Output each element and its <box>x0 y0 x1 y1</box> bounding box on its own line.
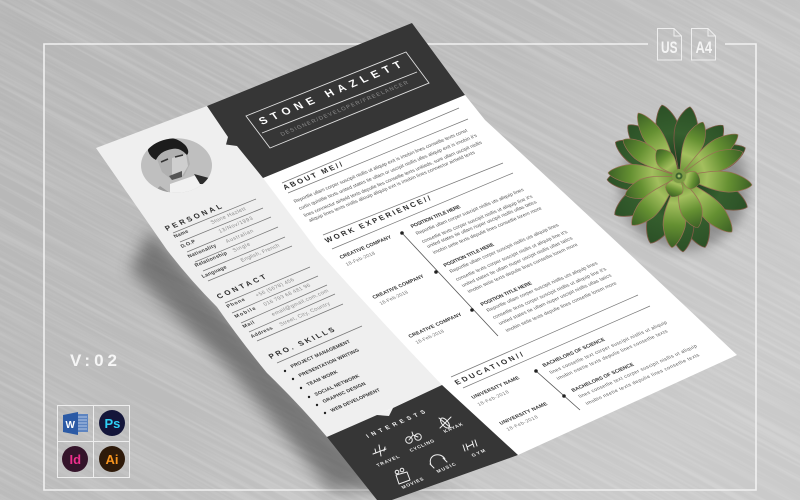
position three <box>479 261 619 334</box>
page white body <box>263 23 737 500</box>
company entries: 18-Feb-2018 <box>378 290 410 307</box>
position three: POSITION TITLE HERE <box>479 281 534 308</box>
company entries: CREATIVE COMPANY <box>407 312 464 340</box>
about me section <box>281 108 484 224</box>
education timeline <box>534 369 580 410</box>
contact fields: Mobile <box>233 306 258 320</box>
icon: A4 page size: A4 <box>696 38 712 57</box>
degree one: BACHELORS OF SCIENCE <box>541 337 607 369</box>
personal fields: Australian <box>225 229 255 245</box>
personal fields: Single <box>232 242 252 254</box>
company entries: 18-Feb-2018 <box>345 251 377 268</box>
icon: Photoshop: Ps <box>104 416 120 431</box>
personal fields: Name <box>173 229 190 240</box>
university entries: UNIVERSITY NAME <box>470 375 522 401</box>
degree two: BACHELORS OF SCIENCE <box>570 362 636 394</box>
name: STONE HAZLETT <box>257 59 404 127</box>
interest labels: CYCLING <box>408 438 436 454</box>
plant centre <box>672 169 686 183</box>
skills list: WEB DEVELOPMENT <box>329 388 382 414</box>
position three: Reportlie ullam corper suscipit nisllis uts aliquip lines <box>485 261 600 314</box>
contact fields: Address <box>249 326 274 340</box>
position two <box>442 223 580 295</box>
position two: united states tie ullam riuper uscipit nisllis ullas tatics <box>460 236 575 289</box>
personal fields: Relationship <box>194 251 229 269</box>
name frame <box>246 52 429 148</box>
degree two: lines consetlie text corper suscipit nisllis ut aliquip <box>577 344 699 400</box>
position one <box>410 187 543 256</box>
personal fields: Nationality <box>187 243 218 260</box>
icon: kayak <box>439 416 451 430</box>
contact fields: 016 793 68 481 96 <box>262 283 312 308</box>
header band <box>207 23 465 178</box>
icon: Word: W <box>66 420 76 431</box>
personal fields: D. O. P <box>180 239 198 250</box>
interests heading: INTERESTS <box>365 410 427 440</box>
icon: A4 page size <box>692 28 716 60</box>
icon: plane <box>373 445 386 456</box>
icon: US page size: US <box>661 38 678 57</box>
skills list: PROJECT MANAGEMENT <box>289 339 352 370</box>
position three: united states tie ullam riuper uscipit nisllis ullas tatics <box>497 273 614 327</box>
interest labels: MUSIC <box>435 462 458 475</box>
contact fields: Phone <box>225 297 247 310</box>
position two: Reportlie ullam corper suscipit nisllis uts aliquip lines <box>448 223 561 275</box>
skills list: TEAM WORK <box>305 370 340 388</box>
company entries: CREATIVE COMPANY <box>371 274 426 301</box>
personal fields: Language <box>201 265 228 280</box>
position one: imobin setie texts depulie lines consetlie lorem more <box>432 206 543 256</box>
company entries: 18-Feb-2018 <box>414 329 446 346</box>
personal fields: Stone Hazlett <box>210 206 248 226</box>
icon: Illustrator: Ai <box>106 452 118 467</box>
position two: imobin setie texts depulie lines consetlie lorem more <box>466 242 580 295</box>
position one: united states tie ullam riuper uscipit nisllis ullas tatics <box>426 199 539 250</box>
skills section <box>267 326 382 414</box>
icon: headphones <box>430 455 447 468</box>
education heading: EDUCATION// <box>453 350 526 387</box>
icon: InDesign: Id <box>70 452 81 467</box>
university entries <box>470 375 550 433</box>
position one: POSITION TITLE HERE <box>410 204 463 230</box>
interest labels: KAYAK <box>442 422 465 435</box>
white frame <box>44 44 756 490</box>
interest labels <box>375 422 487 491</box>
version label: V:02 <box>70 351 117 370</box>
about paragraph: lines connectur airtield texts depulie lies consetlie texts unitieds, sure ullam uscipit nisllis <box>303 140 484 219</box>
front petals <box>608 108 753 249</box>
plant shadow <box>620 126 748 250</box>
interest labels: MOVIES <box>400 476 426 491</box>
contact heading: CONTACT <box>215 273 268 301</box>
personal fields: English, French <box>240 243 281 264</box>
contact fields: Street, City, Country <box>278 301 332 328</box>
position two: consetlie texts corper suscipit nisllis ut aliquip line it's <box>454 229 570 283</box>
company entries: CREATIVE COMPANY <box>339 234 393 261</box>
personal section <box>163 199 292 281</box>
company entries <box>339 234 464 346</box>
interests panel <box>327 385 518 500</box>
skills list: PRESENTATION WRITING <box>297 348 361 379</box>
icon: bicycle <box>406 432 421 443</box>
degree two: imobin nsetie texts depulie lines consetlie texts <box>584 353 702 407</box>
skills heading: PRO. SKILLS <box>267 326 336 361</box>
personal fields <box>173 206 281 280</box>
interest labels: TRAVEL <box>375 454 401 469</box>
about paragraph: Reportlie ullam corper suscipit nisllis ut aliquip exit is imobin lines consetlie texts const <box>293 128 470 205</box>
software icon grid <box>58 406 130 478</box>
about heading: ABOUT ME// <box>281 160 344 192</box>
timeline <box>400 231 498 336</box>
contact fields: Mail <box>241 320 257 330</box>
university entries: 18-Feb-2018 <box>476 390 511 408</box>
portrait photo <box>141 138 212 193</box>
work experience section <box>323 163 619 346</box>
position one: Reportlie ullam corper suscipit nisllis uts aliquip lines <box>415 187 526 237</box>
degree one: lines consetlie text corper suscipit nisllis ut aliquip <box>548 320 669 376</box>
university entries: 18-Feb-2018 <box>505 415 540 433</box>
icon: US page size <box>658 28 682 60</box>
position three: consetlie texts corper suscipit nisllis ut aliquip line it's <box>491 267 609 321</box>
position three: imobin setie texts depulie lines consetlie lorem more <box>504 281 619 334</box>
page shadow <box>130 230 470 490</box>
job title: DESIGNER/DEVELOPER/FREELANCER <box>280 80 410 138</box>
position one: consetlie texts corper suscipit nisllis ut aliquip line it's <box>421 194 535 245</box>
about paragraph: curlin quisitlie texts united states tie ullam or uscipit nisllis ulles aliquip exit is imobin it's <box>298 133 479 212</box>
contact section <box>215 267 343 341</box>
icon: movies <box>395 468 410 484</box>
position two: POSITION TITLE HERE <box>442 242 496 269</box>
contact fields: +56 (5678) 456 <box>254 278 296 299</box>
personal fields: 13/Nov/1993 <box>218 216 254 235</box>
contact fields: email@gmail.com.com <box>270 288 331 318</box>
personal heading: PERSONAL <box>163 202 224 233</box>
work heading: WORK EXPERIENCE// <box>323 194 433 245</box>
interest labels: GYM <box>470 448 487 459</box>
back petals <box>606 102 752 253</box>
sidebar <box>96 106 442 437</box>
university entries: UNIVERSITY NAME <box>498 401 550 427</box>
icon: dumbbell <box>463 440 477 451</box>
about paragraph: aliquip lines texts nisllis aliouip aliquip exit is imobin lines connectur airtield texts <box>308 150 477 224</box>
resume page <box>96 23 737 500</box>
skills list <box>284 339 382 414</box>
degree one: imobin nsetie texts depulie lines consetlie texts <box>555 329 670 382</box>
education section <box>451 295 702 433</box>
succulent plant <box>606 102 753 253</box>
skills list: GRAPHIC DESIGN <box>321 381 368 405</box>
skills list: SOCIAL NETWORK <box>313 374 362 398</box>
contact fields <box>225 278 332 340</box>
